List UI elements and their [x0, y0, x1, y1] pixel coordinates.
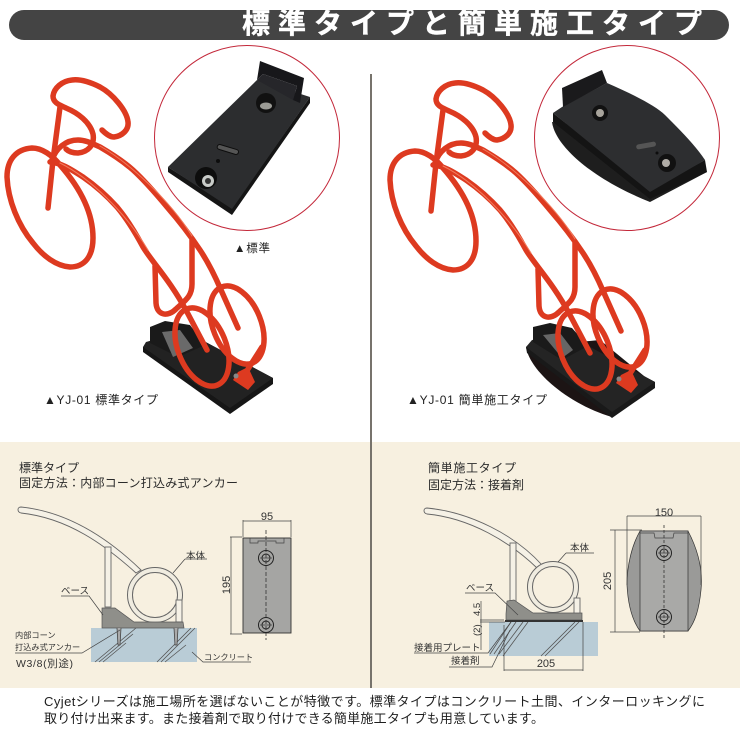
caption: standard type: ▲YJ-01 標準タイプ: [44, 392, 158, 407]
heading: standard type: 固定方法：内部コーン打込み式アンカー: [19, 475, 238, 490]
callouts: standard: ベース: [61, 586, 89, 597]
heading: easy install type: 固定方法：接着剤: [428, 477, 524, 492]
caption: standard detail: ▲標準: [234, 241, 270, 255]
photo: easy install bicycle rack: [390, 83, 658, 418]
callouts: easy install: 接着剤: [451, 655, 480, 667]
plan view: standard: 95: [261, 511, 273, 523]
panel: standard type drawing: [15, 460, 291, 670]
bike frame: easy install: [390, 83, 658, 397]
caption: easy install type: ▲YJ-01 簡単施工タイプ: [407, 392, 547, 407]
photo: standard type bicycle rack: [7, 80, 275, 414]
plan view: easy install: 150: [655, 507, 673, 519]
callouts: standard: 本体: [186, 550, 206, 562]
inset: easy install base plate: [534, 46, 720, 230]
heading: easy install type: 簡単施工タイプ: [428, 460, 516, 475]
inset: standard base plate: [154, 46, 340, 230]
base plate: standard: [143, 321, 273, 414]
heading: easy install type: [428, 460, 524, 492]
base plate: easy install: [526, 323, 655, 418]
callouts: standard: W3/8(別途): [16, 658, 73, 670]
callouts: standard: [15, 550, 253, 670]
callouts: standard: 打込み式アンカー: [15, 642, 80, 652]
side view: standard: [18, 507, 197, 662]
center divider: [370, 74, 372, 688]
side view: easy install: [424, 508, 598, 656]
description text: [44, 694, 705, 726]
callouts: easy install: 本体: [570, 542, 590, 554]
callouts: easy install: 205: [537, 658, 555, 670]
callouts: easy install: 4.5: [472, 603, 483, 616]
callouts: easy install: (2): [472, 624, 483, 636]
plan view: standard: [221, 511, 291, 640]
callouts: easy install: ベース: [466, 583, 494, 594]
callouts: easy install: 接着用プレート: [414, 642, 481, 654]
callouts: standard: コンクリート: [204, 653, 253, 662]
heading: standard type: [19, 460, 238, 490]
heading: standard type: 標準タイプ: [19, 460, 79, 475]
callouts: standard: 内部コーン: [15, 630, 56, 640]
description text: 取り付け出来ます。また接着剤で取り付けできる簡単施工タイプも用意しています。: [44, 711, 544, 726]
callouts: easy install: [414, 542, 594, 671]
panel: easy install type drawing: [414, 460, 701, 671]
base plate photo: [168, 61, 310, 215]
plan view: easy install: 205: [602, 572, 614, 590]
panel: drawing background: [0, 442, 740, 688]
description text: Cyjetシリーズは施工場所を選ばないことが特徴です。標準タイプはコンクリート土間、インターロッキングに: [44, 694, 705, 709]
plan view: easy install: [602, 507, 701, 640]
base plate photo: [552, 70, 707, 202]
title banner: 標準タイプと簡単施工タイプ: [242, 8, 710, 39]
plan view: standard: 195: [221, 576, 233, 594]
bike frame: standard: [7, 80, 275, 394]
title banner: [9, 8, 729, 40]
